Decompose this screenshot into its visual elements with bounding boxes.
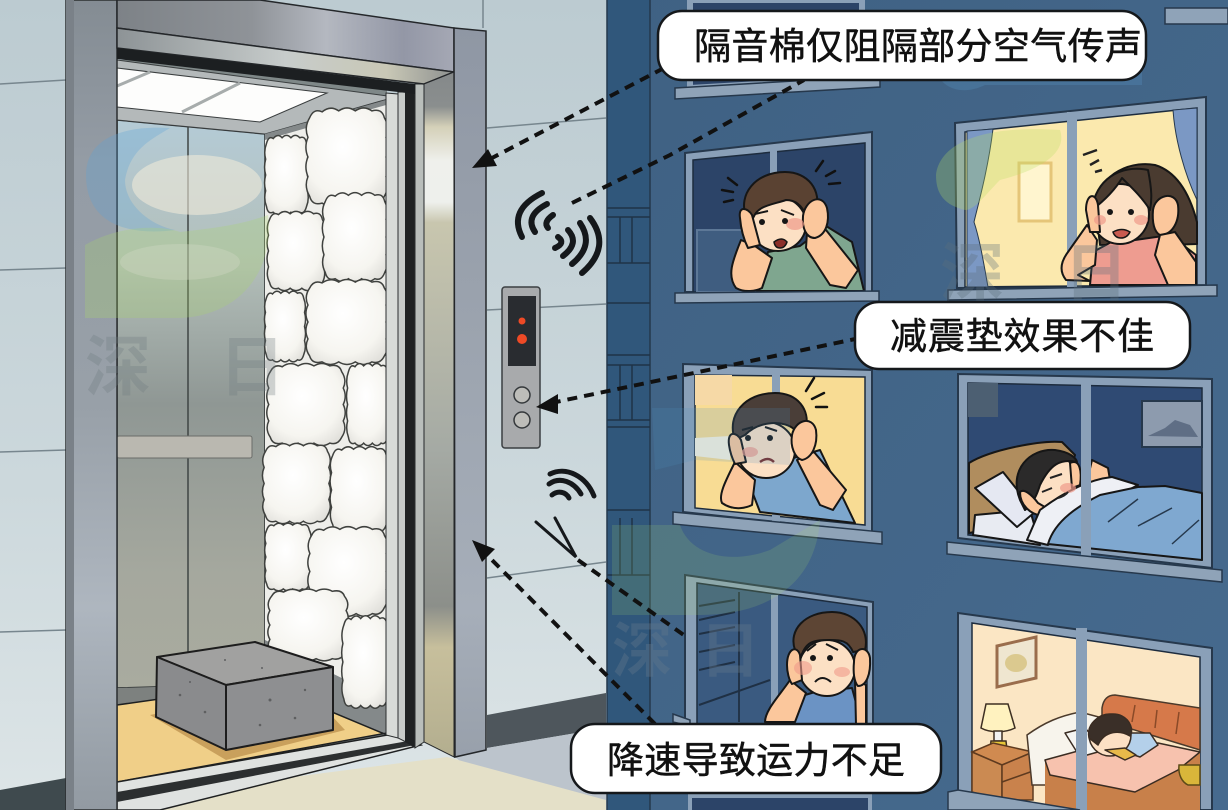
window: child's bedroom xyxy=(948,613,1212,810)
person: man in navy shirt xyxy=(765,612,870,725)
person: woman xyxy=(1062,164,1197,285)
callout: slowed speed xyxy=(571,724,941,793)
watermark: left: 深日 xyxy=(85,330,353,404)
window: man in navy shirt xyxy=(673,575,873,726)
person: sleeping in bed xyxy=(969,442,1202,560)
person: man in blue shirt xyxy=(721,393,855,523)
window: sleeping person xyxy=(947,374,1222,582)
window: woman, warm light xyxy=(948,97,1217,300)
watermark: right top xyxy=(936,50,1188,310)
bedside table xyxy=(972,743,1033,800)
back wall xyxy=(117,120,265,688)
bedside lamp xyxy=(981,704,1015,754)
elevator door frame xyxy=(66,0,486,810)
stress marks xyxy=(722,161,840,202)
elevator call panel xyxy=(502,287,540,448)
inner jamb xyxy=(424,72,454,757)
watermark: right top: 深日 xyxy=(940,238,1188,310)
window: top right partial xyxy=(1165,8,1228,24)
child sleeping in bed xyxy=(1045,714,1200,792)
threshold xyxy=(117,733,421,810)
watermark: lower centre xyxy=(612,408,820,685)
callout: damping pad: 减震垫效果不佳 xyxy=(890,316,1154,357)
elevator cabin interior xyxy=(117,60,421,810)
watermark: lower centre: 深日 xyxy=(612,618,788,685)
ceiling xyxy=(117,60,395,134)
building facade xyxy=(607,0,1228,810)
dashed line: top callout to sound waves xyxy=(572,80,804,203)
arrow: speed callout to door frame xyxy=(472,540,655,724)
window: bottom partial xyxy=(690,796,870,810)
window: top partial xyxy=(675,0,880,99)
arrow: top callout to door frame xyxy=(472,68,664,168)
stress marks xyxy=(1083,150,1102,172)
sound wave icon: lower xyxy=(536,471,594,557)
dashed line: sound icon to lower window xyxy=(578,560,688,638)
watermark: left xyxy=(85,128,353,404)
arrow: vibration callout to call panel xyxy=(536,338,860,414)
window: man, yellow light xyxy=(673,364,882,544)
callout: sound insulation: 隔音棉仅阻隔部分空气传声 xyxy=(694,26,1142,67)
handrail xyxy=(117,436,252,458)
sound wave icon: upper xyxy=(518,193,599,273)
left wall background xyxy=(0,0,610,810)
stress marks xyxy=(806,378,827,407)
right wall xyxy=(265,100,386,738)
callout: sound insulation xyxy=(658,11,1146,80)
callout: slowed speed: 降速导致运力不足 xyxy=(607,740,905,781)
person: man in green shirt xyxy=(731,172,864,291)
header xyxy=(117,0,454,72)
basket xyxy=(1179,765,1200,785)
window: man in green shirt xyxy=(675,132,879,303)
insulation cotton xyxy=(262,105,389,708)
wall picture xyxy=(1142,401,1202,447)
callout: damping pad xyxy=(855,302,1190,369)
wall picture xyxy=(997,637,1036,687)
elevator door edge xyxy=(386,84,424,748)
concrete block xyxy=(150,642,345,760)
outer jamb xyxy=(454,28,486,757)
cabin floor xyxy=(117,684,387,782)
